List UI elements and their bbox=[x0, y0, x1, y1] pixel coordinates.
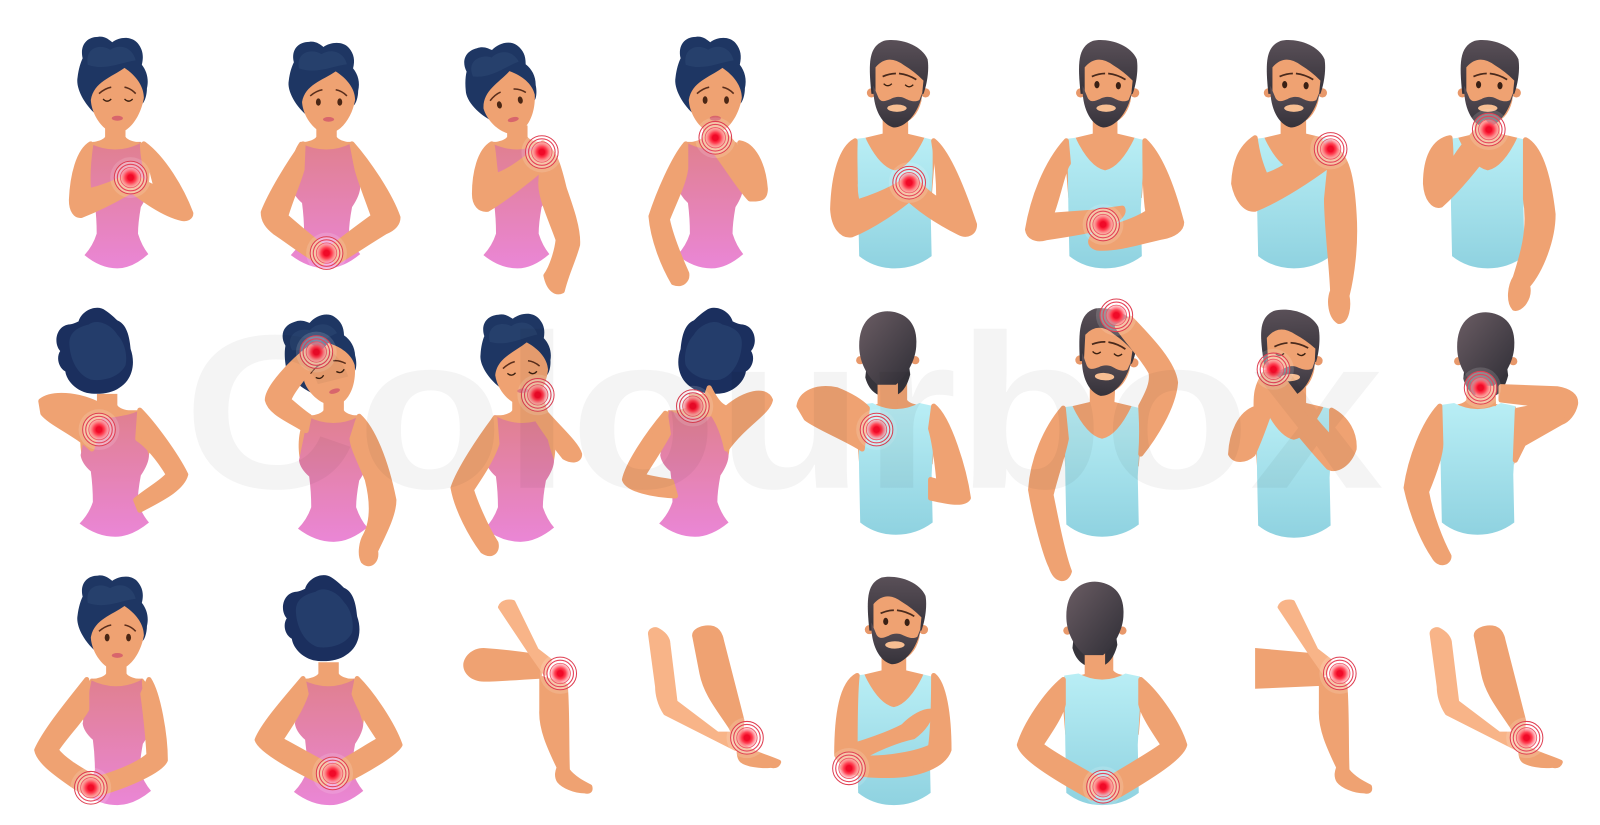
torso bbox=[483, 142, 551, 268]
pain marker bbox=[1310, 129, 1351, 169]
left arm raised bbox=[267, 347, 321, 431]
pain marker bbox=[110, 157, 151, 198]
torso bbox=[80, 410, 150, 537]
neck bbox=[491, 126, 543, 149]
hair bbox=[1063, 582, 1127, 676]
hair bbox=[856, 311, 919, 405]
tank top bbox=[854, 116, 936, 268]
left arm bbox=[37, 680, 94, 796]
figure: man throat pain bbox=[1426, 40, 1553, 308]
head bbox=[457, 37, 546, 142]
thigh bbox=[463, 648, 542, 682]
neck bbox=[496, 399, 548, 423]
figure: woman back, shoulder blade pain bbox=[41, 308, 186, 537]
figure: man back, shoulder blade pain bbox=[799, 311, 968, 535]
figure: woman wrist pain bbox=[37, 575, 165, 808]
pain marker bbox=[856, 409, 897, 450]
watermark: Colourbox bbox=[184, 290, 1384, 535]
right arm bbox=[1511, 140, 1553, 308]
tank top bbox=[1061, 385, 1143, 537]
pain marker bbox=[889, 162, 930, 203]
left arm bbox=[1406, 406, 1449, 563]
right arm bbox=[541, 143, 578, 292]
right arm bbox=[136, 410, 186, 510]
tank top bbox=[1437, 372, 1518, 535]
head bbox=[865, 577, 928, 673]
pain marker bbox=[79, 409, 119, 450]
figure: man toothache, hand on cheek bbox=[1231, 308, 1354, 538]
torso bbox=[291, 142, 362, 268]
tank top bbox=[853, 653, 935, 805]
neck bbox=[89, 126, 141, 149]
pain marker bbox=[1460, 367, 1501, 408]
pain marker bbox=[1096, 295, 1137, 336]
figure: woman leg, ankle pain bbox=[650, 628, 779, 766]
figure: woman leg, knee pain bbox=[463, 602, 590, 791]
tank top bbox=[1061, 643, 1143, 805]
lower leg bbox=[1280, 602, 1370, 791]
legs bbox=[650, 628, 779, 766]
pain marker bbox=[1319, 653, 1360, 694]
neck bbox=[302, 662, 354, 686]
left arm bbox=[651, 144, 687, 284]
left arm bbox=[624, 413, 676, 496]
right arm bbox=[90, 680, 165, 794]
figure: man headache, hand on head bbox=[1031, 295, 1176, 579]
right arm bbox=[842, 676, 949, 776]
pain marker bbox=[1468, 109, 1509, 150]
head bbox=[1076, 40, 1139, 137]
tank top bbox=[1064, 116, 1146, 268]
hair bbox=[1454, 312, 1517, 406]
neck bbox=[81, 394, 133, 418]
torso bbox=[294, 679, 365, 805]
pain marker bbox=[727, 717, 767, 758]
right arm bbox=[526, 388, 580, 460]
tank top bbox=[1447, 116, 1529, 268]
pain marker bbox=[296, 332, 337, 372]
neck bbox=[90, 662, 142, 686]
figure: man leg, knee pain bbox=[1255, 602, 1370, 791]
thigh bbox=[1255, 648, 1323, 689]
figure: woman headache, hand on forehead bbox=[267, 308, 394, 564]
head bbox=[1073, 307, 1141, 407]
neck bbox=[672, 394, 724, 418]
figure: man stomach pain bbox=[1028, 40, 1182, 268]
hair bbox=[678, 308, 755, 394]
pain marker bbox=[312, 753, 353, 794]
torso bbox=[82, 679, 152, 805]
figure: man back, lower back pain bbox=[1019, 582, 1185, 807]
left arm bbox=[474, 144, 546, 209]
right arm bbox=[1091, 141, 1182, 248]
pain marker bbox=[521, 132, 562, 172]
right arm bbox=[352, 416, 394, 564]
hair bbox=[283, 575, 359, 661]
pain marker bbox=[1083, 204, 1123, 245]
right arm bbox=[127, 144, 191, 219]
left arm bbox=[1231, 372, 1284, 459]
pain marker bbox=[1506, 717, 1547, 758]
torso bbox=[677, 142, 744, 268]
head bbox=[77, 37, 148, 133]
neck bbox=[307, 399, 359, 423]
right arm to neck bbox=[1501, 387, 1576, 460]
left arm bbox=[257, 679, 332, 784]
right arm bbox=[332, 679, 400, 784]
right arm bbox=[903, 141, 974, 234]
pain marker bbox=[70, 767, 111, 808]
head bbox=[1257, 308, 1325, 408]
pain marker bbox=[1253, 349, 1294, 390]
tank top bbox=[1253, 386, 1335, 538]
figure: woman shoulder pain bbox=[457, 37, 578, 292]
pain marker bbox=[306, 233, 347, 273]
right arm bbox=[329, 144, 398, 262]
head bbox=[275, 308, 368, 416]
figure: man shoulder pain bbox=[1234, 40, 1355, 321]
pain marker bbox=[1083, 766, 1123, 807]
figure: woman back, lower back pain bbox=[257, 575, 400, 805]
legs bbox=[1432, 628, 1560, 766]
torso bbox=[84, 142, 150, 268]
hair bbox=[56, 308, 133, 394]
right arm bbox=[1270, 383, 1354, 468]
pain marker bbox=[829, 748, 869, 789]
pain marker bbox=[672, 386, 713, 427]
left arm bbox=[837, 676, 931, 764]
neck bbox=[687, 126, 739, 149]
right arm raised bbox=[1117, 318, 1176, 454]
left arm bbox=[1031, 408, 1069, 579]
raised arm bbox=[41, 395, 102, 449]
figure: man leg, ankle pain bbox=[1432, 628, 1560, 766]
left arm bbox=[1019, 680, 1100, 798]
figure: woman toothache, hand on jaw bbox=[453, 311, 580, 554]
torso bbox=[298, 415, 369, 542]
figure: man back, neck pain bbox=[1406, 312, 1576, 563]
head bbox=[1264, 40, 1327, 137]
raised arm bbox=[799, 389, 867, 449]
figure: man wrist pain bbox=[829, 577, 949, 805]
pain marker bbox=[695, 117, 736, 158]
pain marker bbox=[517, 374, 558, 415]
head bbox=[288, 42, 359, 134]
head bbox=[77, 575, 148, 670]
right arm bbox=[712, 133, 765, 199]
left arm bbox=[453, 418, 497, 554]
figure: woman chest pain, eyes closed bbox=[71, 37, 191, 268]
right arm bbox=[1327, 148, 1355, 321]
left arm bbox=[1426, 122, 1498, 205]
left arm bbox=[1234, 138, 1332, 209]
head bbox=[867, 40, 930, 137]
head bbox=[675, 37, 746, 133]
head bbox=[478, 311, 554, 408]
right arm bbox=[1106, 680, 1185, 798]
head bbox=[1458, 40, 1521, 137]
left arm bbox=[833, 141, 913, 235]
torso bbox=[485, 415, 555, 542]
figure: man chest pain, eyes closed bbox=[833, 40, 974, 268]
lower leg bbox=[500, 602, 590, 791]
figure: woman stomach pain bbox=[263, 42, 398, 273]
right arm bbox=[931, 406, 968, 502]
pain marker bbox=[540, 653, 581, 694]
left arm bbox=[1028, 141, 1123, 239]
right arm to neck bbox=[704, 388, 770, 449]
left arm bbox=[71, 144, 133, 215]
figure: woman throat pain bbox=[651, 37, 765, 284]
neck bbox=[300, 126, 352, 149]
torso bbox=[659, 410, 730, 537]
tank top bbox=[1253, 116, 1335, 268]
tank top bbox=[855, 372, 937, 535]
left arm bbox=[263, 144, 329, 263]
figure: woman back, neck pain bbox=[624, 308, 770, 537]
